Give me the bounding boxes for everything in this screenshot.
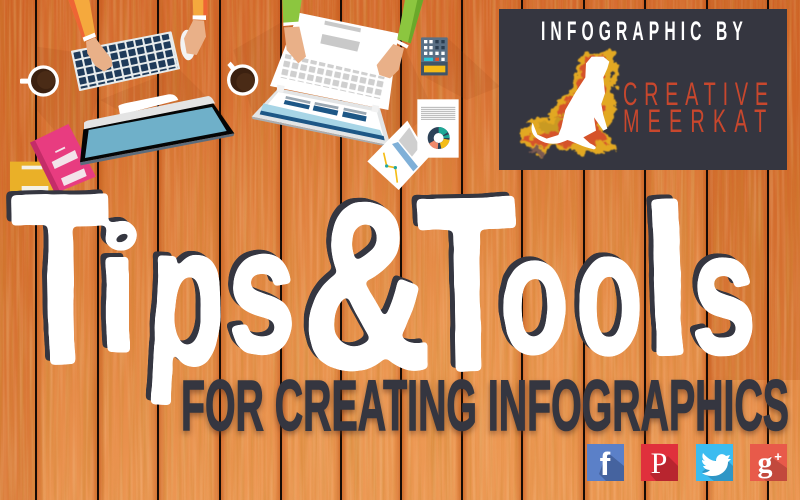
main title: &	[302, 154, 432, 418]
main title: s	[692, 193, 756, 392]
icon: keyboard	[72, 32, 179, 90]
i dot hole	[115, 232, 129, 244]
icon: google plus	[750, 444, 787, 481]
icon: facebook: f	[600, 446, 611, 482]
soft diagonal shadows	[37, 13, 500, 160]
main title: l	[638, 162, 697, 402]
icon: chart paper	[367, 121, 429, 190]
main title: p	[143, 183, 232, 408]
main title: o	[575, 192, 643, 392]
icon: google plus: +	[774, 449, 782, 464]
meerkat silhouette	[532, 57, 609, 149]
icon: mouse	[179, 29, 196, 61]
right person arms and hands	[282, 0, 423, 78]
main title	[9, 144, 756, 422]
social icons	[587, 444, 787, 482]
icon: google plus: g	[758, 446, 772, 479]
logo wordmark: MEERKAT	[623, 103, 766, 139]
main title: T	[416, 145, 519, 422]
icon: pinterest: P	[651, 447, 667, 480]
icon: calculator	[421, 37, 448, 75]
icon: report paper	[417, 99, 459, 158]
icon: monitor	[80, 94, 234, 165]
icon: pinterest	[641, 444, 678, 481]
icon: twitter	[696, 444, 733, 481]
left person second arm and hand	[184, 0, 207, 55]
logo wordmark	[623, 76, 768, 139]
icon: facebook	[587, 444, 624, 482]
left person arm and hand	[68, 0, 112, 72]
logo wordmark: CREATIVE	[623, 76, 768, 112]
main title: T	[9, 144, 112, 416]
desk illustrations	[10, 0, 500, 200]
main title: i	[97, 194, 139, 387]
logo heading: INFOGRAPHIC BY	[541, 16, 743, 46]
icon: left coffee cup	[20, 65, 59, 97]
icon: laptop	[252, 13, 398, 147]
icon: yellow book	[10, 162, 55, 200]
icon: pink notebook	[30, 124, 96, 193]
logo panel	[499, 9, 787, 170]
main title: s	[228, 192, 296, 390]
main title: o	[500, 203, 568, 388]
meerkat logo mark	[522, 50, 618, 155]
icon: right coffee cup	[227, 62, 258, 96]
